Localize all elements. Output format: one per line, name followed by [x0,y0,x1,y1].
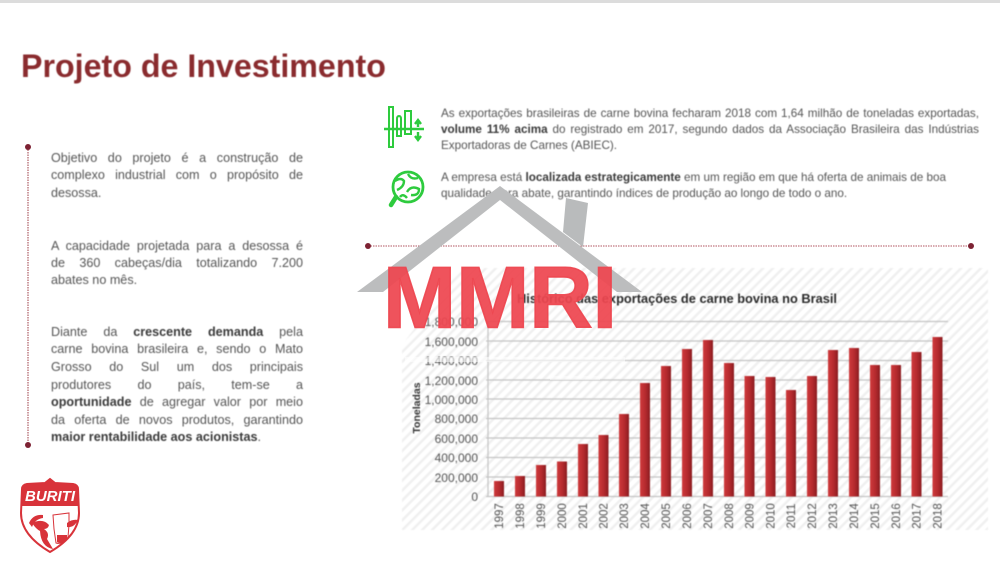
left text: project objective: complexo industrial com o propósito de [51,168,303,182]
left text: demand and opportunity [50,325,304,444]
logo: Buriti shield: BURITI [25,488,76,505]
icon: green bar chart [384,106,424,148]
left text: demand and opportunity: carne bovina brasileira e, sendo o Mato [51,342,303,356]
bar chart: export history: 2016 [891,503,903,529]
bar chart: export history: 2005 [661,503,673,529]
text: strategic location [440,171,946,200]
left text: demand and opportunity: produtores do país, tem-se a [51,378,303,392]
left text: project objective [50,151,304,200]
bar chart: export history: 1997 [494,503,506,529]
left dotted timeline [25,144,31,448]
bar chart: export history: 1998 [515,503,527,529]
title: Projeto de Investimento [21,48,386,84]
logo: Buriti shield [20,478,80,554]
left text: capacity: abates no mês. [51,273,137,287]
text: exports 2018 [440,107,980,152]
bar chart: export history: Toneladas [411,382,423,434]
left text: capacity: A capacidade projetada para a desossa é [51,239,303,253]
bar chart: export history: 1999 [536,503,548,529]
left text: demand and opportunity: da oferta de novos produtos, garantindo [51,413,303,427]
text: strategic location: A empresa está localizada estrategicamente em um região em que há oferta de animais de boa [441,171,946,184]
bar chart: export history: 2007 [703,503,715,529]
left text: capacity: de 360 cabeças/dia totalizando 7.200 [51,256,303,270]
text: exports 2018: As exportações brasileiras de carne bovina fecharam 2018 com 1,64 milhão de toneladas exportadas, [441,107,979,120]
left text: demand and opportunity: Grosso do Sul um dos principais [51,360,303,374]
watermark: house and MMRI: MMRI [383,250,617,346]
bar chart: export history: 600,000 [435,432,478,446]
left text: demand and opportunity: Diante da crescente demanda pela [51,325,303,339]
bar chart: export history: 2017 [912,503,924,529]
bar chart: export history: 0 [471,490,478,504]
left text: capacity [50,239,304,287]
bar chart: export history: 2002 [598,503,610,529]
bar chart: export history: 400,000 [435,451,478,465]
bar chart: export history: 2013 [828,503,840,529]
bar chart: export history: 2015 [870,503,882,529]
text: strategic location: qualidade para abate, garantindo índices de produção ao longo de todo o ano. [441,187,847,200]
bar chart: export history: 800,000 [435,412,478,426]
bar chart: export history: 200,000 [435,471,478,485]
left text: demand and opportunity: oportunidade de agregar valor por meio [51,395,303,409]
bar chart: export history: 1,600,000 [425,335,478,349]
bar chart: export history: 1,800,000 [425,315,478,329]
bar chart: export history: 1,200,000 [425,374,478,388]
bar chart: export history: 2012 [807,503,819,529]
bar chart: export history: 2006 [682,503,694,529]
icon: green magnifier globe [388,170,424,208]
bar chart: export history: 2018 [932,503,944,529]
text: exports 2018: volume 11% acima do registrado em 2017, segundo dados da Associação Brasileira das Indústrias [441,123,979,136]
bar chart: export history: 2009 [744,503,756,529]
bar chart: export history: 2000 [557,503,569,529]
bar chart: export history: 2001 [578,503,590,529]
bar chart: export history: 2010 [766,503,778,529]
bar chart: export history: 1,400,000 [425,354,478,368]
bar chart: export history: 1,000,000 [425,393,478,407]
bar chart: export history: 2003 [619,503,631,529]
bar chart: export history: Histórico das exportações de carne bovina no Brasil [517,292,837,306]
bar chart: export history: 2004 [640,503,652,529]
left text: demand and opportunity: maior rentabilidade aos acionistas. [51,430,261,444]
bar chart: export history: 2011 [786,504,798,528]
bar chart: export history: 2014 [849,503,861,529]
bar chart: export history: 2008 [724,503,736,529]
screenshot frame edge [0,0,1000,3]
horizontal dotted divider [365,243,974,249]
text: exports 2018: Exportadoras de Carnes (ABIEC). [441,139,617,152]
left text: project objective: desossa. [51,186,101,200]
left text: project objective: Objetivo do projeto é a construção de [51,151,303,165]
